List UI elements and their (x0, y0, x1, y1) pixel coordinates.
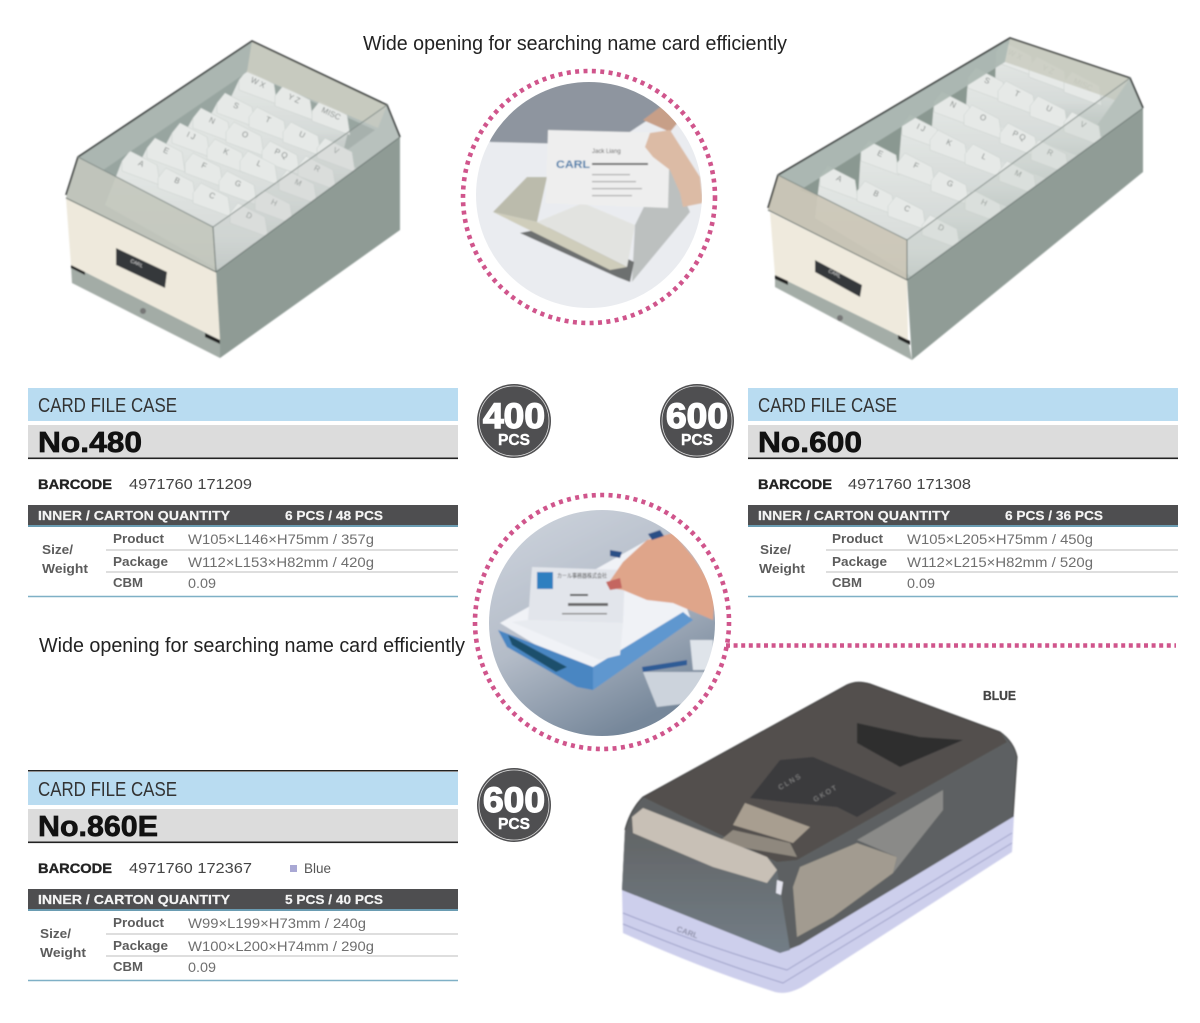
product photo: card file case No.480: F (200, 161, 208, 171)
size and weight table: Package (113, 554, 168, 569)
product photo: card file case No.480: P Q (273, 147, 289, 161)
size and weight table (28, 915, 458, 980)
product photo: card file case No.600: D (937, 222, 946, 233)
size and weight table: Size/ (40, 926, 71, 941)
product photo: card file case No.600: O (978, 112, 988, 123)
product photo: card file case No.600: U (1045, 103, 1054, 114)
product photo: card file case No.480: I J (185, 130, 197, 142)
photo circle: hand placing card in blue case (475, 495, 729, 749)
model number (28, 425, 458, 459)
product photo: card file case No.600: H (980, 197, 989, 208)
size and weight table: 0.09 (907, 575, 935, 591)
badge: 600 PCS (660, 384, 734, 458)
barcode: BARCODE (38, 476, 112, 492)
product photo: card file case No.600: G (945, 178, 955, 189)
product photo: card file case No.600: R (1046, 147, 1055, 158)
photo circle: hand pulling name card from case (463, 71, 715, 323)
size and weight table: Weight (42, 561, 89, 576)
size and weight table (748, 531, 1178, 596)
model number (28, 809, 458, 843)
product photo: card file case No.480: S (232, 101, 240, 111)
product photo: card file case No.480 (66, 41, 400, 358)
size and weight table: 0.09 (188, 575, 216, 591)
dotted ring (463, 71, 715, 323)
quantity bar (28, 889, 458, 911)
product photo: card file case No.600: T (1013, 89, 1021, 99)
size and weight table: Product (113, 531, 165, 546)
barcode and colour (38, 860, 331, 877)
front highlight band (632, 808, 777, 883)
product photo: card file case No.480: T (264, 115, 272, 125)
product photo: card file case No.860E: G K O T (812, 785, 839, 804)
quantity bar (28, 505, 458, 527)
badge: 600 PCS for No.860E (477, 768, 551, 842)
product photo: card file case No.600: A (835, 174, 844, 184)
size and weight table: CBM (832, 575, 862, 590)
photo circle: hand pulling name card from case: Jack Liang (592, 149, 621, 155)
badge: 600 PCS for No.860E: 600 (483, 781, 545, 820)
product photo: card file case No.480: B (173, 176, 181, 186)
product photo: card file case No.600: N (949, 99, 958, 110)
product photo: card file case No.860E (622, 682, 1017, 993)
product photo: card file case No.480: CARL (129, 258, 144, 270)
product photo: card file case No.600: Y Z (1041, 63, 1056, 76)
colour label: BLUE: BLUE (983, 689, 1016, 703)
model number: No.480 (38, 427, 142, 459)
product photo: card file case No.600: P Q (1011, 129, 1027, 143)
quantity bar: INNER / CARTON QUANTITY (758, 508, 950, 523)
heading: top caption: Wide opening for searching name card efficiently (363, 33, 787, 55)
product photo: card file case No.480: O (240, 129, 250, 140)
product photo: card file case No.480: G (233, 178, 243, 189)
product photo: card file case No.480: D (245, 210, 254, 221)
barcode: 4971760 171209 (129, 476, 252, 493)
product photo: card file case No.480: R (313, 163, 322, 174)
badge: 600 PCS for No.860E: PCS (498, 816, 530, 833)
barcode and colour: 4971760 172367 (129, 860, 252, 877)
badge: 600 PCS: PCS (681, 432, 713, 449)
quantity bar: 6 PCS / 48 PCS (285, 508, 383, 523)
category header (28, 388, 458, 421)
product photo: card file case No.600: CARL (827, 268, 842, 280)
size and weight table: CBM (113, 575, 143, 590)
size and weight table: Package (832, 554, 887, 569)
size and weight table: CBM (113, 959, 143, 974)
size and weight table: Product (832, 531, 884, 546)
lavender base (622, 815, 1014, 993)
product photo: card file case No.480: H (270, 197, 279, 208)
product photo: card file case No.860E: C L N S (778, 773, 802, 792)
model number: No.600 (758, 427, 862, 459)
size and weight table: W105×L146×H75mm / 357g (188, 531, 374, 547)
product photo: card file case No.480: W X (249, 75, 267, 90)
lid top surface (643, 682, 1007, 862)
size and weight table: W112×L215×H82mm / 520g (907, 554, 1093, 570)
product photo: card file case No.600: C (903, 203, 912, 214)
barcode: 4971760 171308 (848, 476, 971, 493)
product photo: card file case No.600: F (912, 161, 920, 171)
lid front face (622, 808, 790, 953)
product photo: card file case No.480: L (255, 159, 263, 169)
caption: second wide opening note: Wide opening for searching name card efficiently (39, 635, 465, 657)
size and weight table: Package (113, 938, 168, 953)
category header (28, 770, 458, 805)
badge: 400 PCS: 400 (483, 397, 545, 436)
category header (748, 388, 1178, 421)
category header: CARD FILE CASE (758, 395, 897, 417)
lid side tan reflection (793, 843, 897, 937)
smoked lid body (622, 682, 1017, 953)
product photo: card file case No.480: M (293, 177, 303, 188)
product photo: card file case No.480: C (208, 190, 217, 201)
barcode and colour: BARCODE (38, 860, 112, 876)
model number (748, 425, 1178, 459)
product photo: card file case No.480: V (332, 146, 341, 156)
product photo: card file case No.480: K (222, 147, 231, 157)
panel: No.600 specifications (748, 388, 1178, 596)
size and weight table: W105×L205×H75mm / 450g (907, 531, 1093, 547)
product photo: card file case No.600 (768, 38, 1143, 360)
product photo: card file case No.600: B (872, 189, 880, 199)
size and weight table: W99×L199×H73mm / 240g (188, 915, 366, 931)
dotted ring (475, 495, 729, 749)
size and weight table (28, 531, 458, 596)
panel: No.860E specifications (28, 770, 458, 980)
product photo: card file case No.600: K (945, 138, 954, 148)
product photo: card file case No.480: N (208, 115, 217, 126)
product photo: card file case No.480: U (298, 129, 307, 140)
barcode and colour: Blue (304, 860, 331, 876)
model number: No.860E (38, 811, 158, 843)
product photo: card file case No.480: MISC (320, 105, 342, 122)
product photo: card file case No.860E: CARL (675, 924, 699, 941)
product photo: card file case No.600: V (1079, 120, 1088, 130)
size and weight table: W112×L153×H82mm / 420g (188, 554, 374, 570)
quantity bar: 5 PCS / 40 PCS (285, 892, 383, 907)
product photo: card file case No.600: M (1013, 168, 1023, 179)
category header: CARD FILE CASE (38, 395, 177, 417)
size and weight table: Size/ (760, 542, 791, 557)
product photo: card file case No.600: MISC (1072, 76, 1094, 93)
product photo: card file case No.600: L (980, 152, 988, 162)
product photo: card file case No.600: E (876, 149, 884, 159)
product photo: card file case No.600: W X (1006, 47, 1024, 62)
size and weight table: Weight (40, 945, 87, 960)
size and weight table: Size/ (42, 542, 73, 557)
badge: 400 PCS: PCS (498, 432, 530, 449)
category header: CARD FILE CASE (38, 779, 177, 801)
size and weight table: Weight (759, 561, 806, 576)
quantity bar: INNER / CARTON QUANTITY (38, 508, 230, 523)
quantity bar: INNER / CARTON QUANTITY (38, 892, 230, 907)
product photo: card file case No.480: Y Z (287, 92, 302, 105)
dotted connector line (726, 643, 1176, 648)
barcode (758, 476, 971, 493)
badge: 600 PCS: 600 (666, 397, 728, 436)
product photo: card file case No.600: S (983, 76, 991, 86)
quantity bar: 6 PCS / 36 PCS (1005, 508, 1103, 523)
quantity bar (748, 505, 1178, 527)
photo circle: hand pulling name card from case: CARL (556, 159, 590, 171)
product photo: card file case No.480: E (162, 146, 170, 156)
badge: 400 PCS (477, 384, 551, 458)
product photo: card file case No.600: I J (915, 122, 927, 134)
photo circle: hand placing card in blue case: カール事務器株式会社 (557, 572, 607, 580)
panel: No.480 specifications (28, 388, 458, 596)
barcode (38, 476, 252, 493)
size and weight table: 0.09 (188, 959, 216, 975)
barcode: BARCODE (758, 476, 832, 492)
product photo: card file case No.480: A (137, 159, 146, 169)
size and weight table: Product (113, 915, 165, 930)
size and weight table: W100×L200×H74mm / 290g (188, 938, 374, 954)
